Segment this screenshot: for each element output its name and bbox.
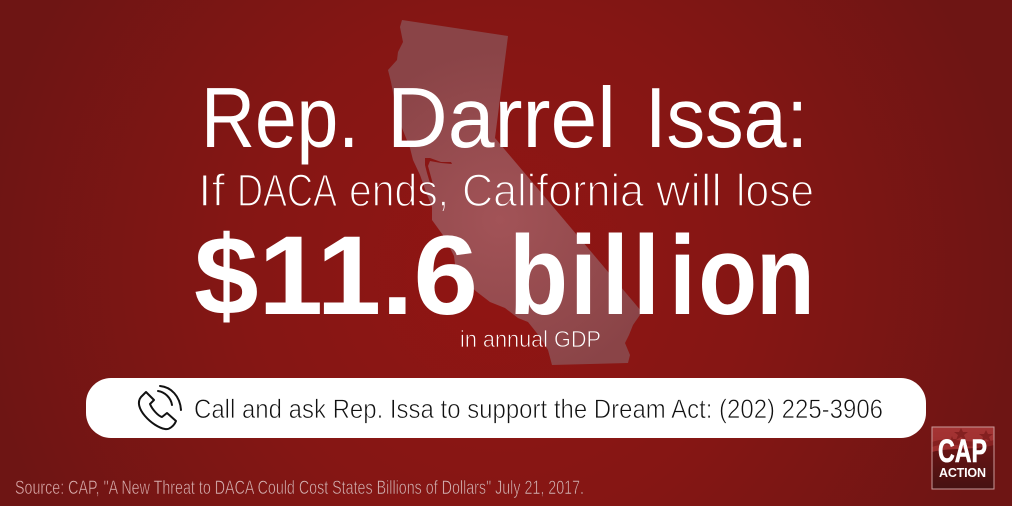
key figure: $11.6 [194,213,478,338]
title: Rep. [201,71,359,166]
icon: California map [388,20,642,365]
logo: CAP Action [932,427,994,489]
icon: phone [139,386,181,429]
subtitle: ends, [349,165,449,216]
bay inlet [425,158,452,188]
subtitle: lose [736,165,814,216]
subtitle: If [198,165,226,216]
figure caption: in annual GDP [460,326,601,352]
subtitle: will [655,165,722,216]
subtitle: California [462,165,645,216]
call to action pill [86,378,926,438]
logo: CAP Action: CAP [938,433,987,469]
key figure unit: billion [509,213,815,339]
source note: Source: CAP, "A New Threat to DACA Could Cost States Billions of Dollars" July 21, 2017. [15,478,584,499]
subtitle: DACA [237,165,337,216]
logo: CAP Action: ACTION [939,466,986,480]
call to action text: Call and ask Rep. Issa to support the Dream Act: (202) 225-3906 [194,394,883,424]
title: Issa: [645,71,808,166]
title: Darrel [387,71,616,166]
subtitle [190,165,825,217]
